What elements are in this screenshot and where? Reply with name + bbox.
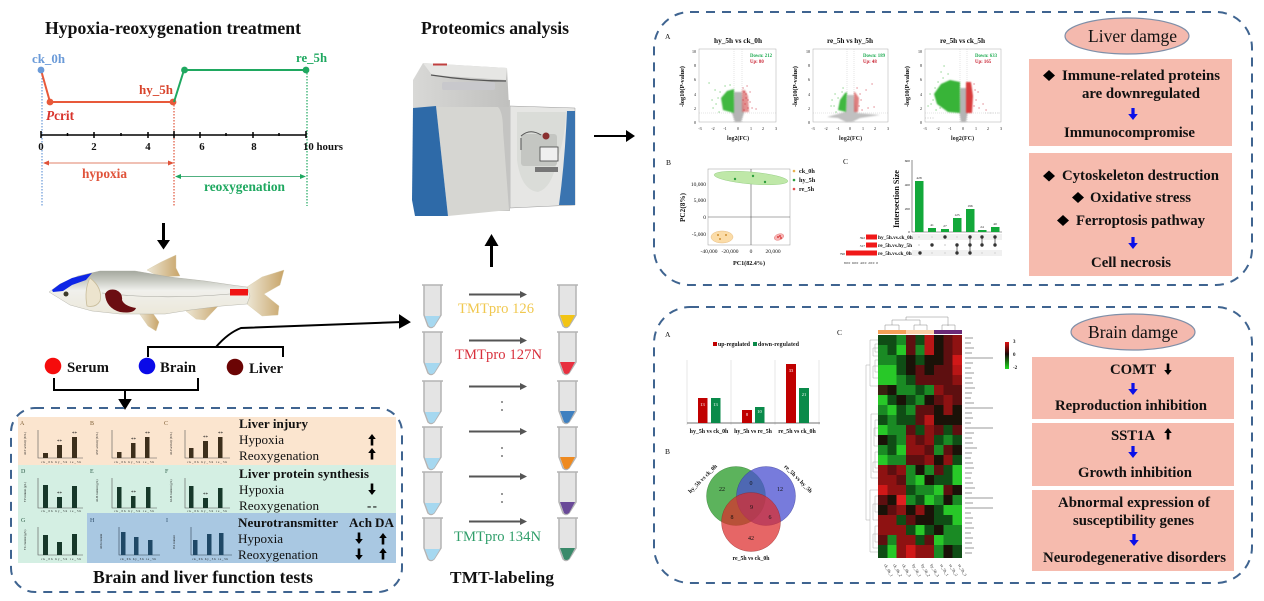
sample labels: re_5h_3	[957, 563, 968, 577]
volcano plot 3: 6	[920, 77, 922, 82]
main cabinet top	[413, 63, 509, 108]
UpSet plot: re_5h.vs.ck_0h	[878, 251, 912, 257]
liver injury bar charts A-C: A	[20, 421, 25, 427]
volcano plot 1	[679, 36, 777, 142]
heading: Proteomics analysis: Proteomics analysis	[421, 18, 569, 38]
text block: liver protein synthesis	[239, 466, 377, 513]
sample labels: ck_0h_3	[901, 563, 912, 577]
letter A: A	[665, 330, 671, 339]
liver injury bar charts A-C: AST activity (U/L)	[95, 432, 99, 455]
UpSet plot	[840, 159, 1002, 265]
box: COMT: COMT	[1110, 362, 1156, 378]
heatmap cells	[878, 335, 962, 558]
neurotransmitter bar charts H-I: I	[166, 518, 168, 524]
bar chart G	[21, 518, 83, 561]
title: Hypoxia-reoxygenation treatment: Hypoxia-reoxygenation treatment	[45, 18, 301, 38]
reoxygenation curve	[174, 67, 309, 102]
bar chart G: G	[21, 518, 26, 524]
PCA plot	[679, 168, 816, 267]
marker: ck_0h	[38, 67, 44, 73]
group colour bar	[878, 330, 962, 334]
time axis: 6	[199, 141, 205, 153]
volcano plot 1: -log10(P-value)	[679, 66, 686, 107]
UpSet plot: 27	[943, 224, 947, 228]
sample labels	[883, 563, 968, 578]
liver protein bar charts D-F: E	[90, 469, 94, 475]
liver protein bar charts D-F: **	[57, 492, 62, 497]
liver protein bar charts D-F: GLB content (g/L)	[169, 480, 173, 502]
hypoxia oxygen curve	[41, 70, 176, 105]
PCA plot: 0	[750, 249, 753, 255]
liver protein bar charts D-F: ALB content (g/L)	[95, 480, 99, 502]
serum: Serum	[67, 360, 110, 376]
volcano plot 3: 0	[920, 120, 922, 125]
callout: Liver damge	[1065, 18, 1189, 54]
liver injury bar charts A-C: ck_0h hy_5h re_5h	[187, 460, 228, 464]
arrow: treatment to fish	[157, 223, 170, 250]
PCA plot: 5,000	[694, 198, 706, 204]
box: neurodegenerative disorders: Abnormal expression of	[1058, 495, 1211, 511]
mass spectrometer	[412, 63, 575, 216]
box: immune proteins: Immune-related proteins	[1062, 68, 1220, 84]
liver injury bar charts A-C: **	[203, 436, 208, 441]
text block: neurotransmitter: Hypoxia	[238, 531, 283, 546]
right module blue panel	[559, 111, 575, 205]
volcano plot 1: 6	[694, 77, 696, 82]
top bezel	[423, 63, 507, 80]
volcano plot 1: 2	[762, 126, 764, 131]
PCA plot: 0	[703, 215, 706, 221]
box: SST1A	[1032, 423, 1234, 486]
UpSet plot: 200	[905, 207, 910, 211]
liver	[227, 359, 284, 377]
liver injury bar charts A-C	[20, 421, 230, 464]
box: neurodegenerative disorders: Neurodegenerative disorders	[1043, 550, 1226, 566]
text block: neurotransmitter: Reoxygenation	[238, 547, 318, 562]
volcano plot 3: re_5h vs ck_5h	[940, 36, 985, 45]
box: cell necrosis: Ferroptosis pathway	[1076, 213, 1206, 229]
letter C: C	[837, 328, 842, 337]
colour scale: -2	[1013, 366, 1018, 371]
Venn diagram: re_5h vs ck_0h	[733, 556, 770, 562]
ion source	[521, 132, 558, 172]
gill cover	[86, 278, 101, 306]
PCA legend	[793, 168, 816, 193]
volcano plot 1: hy_5h vs ck_0h	[714, 36, 762, 45]
UpSet plot: hy_5h.vs.ck_0h	[878, 235, 913, 241]
volcano plot 1: Down: 212	[750, 54, 773, 59]
liver protein bar charts D-F: F	[165, 469, 169, 475]
Venn diagram: 22	[719, 487, 725, 493]
volcano plot 1: 10	[692, 49, 696, 54]
reoxygenation span arrow	[175, 174, 306, 194]
bar chart G: ck_0h hy_5h re_5h	[41, 557, 82, 561]
text block: liver injury	[239, 416, 376, 463]
liver injury bar charts A-C: **	[218, 432, 224, 437]
PCA plot: 10,000	[691, 182, 706, 188]
PCA legend: hy_5h	[799, 177, 816, 184]
muscle sample highlight	[230, 289, 248, 296]
text block: liver injury: Liver injury	[239, 416, 308, 431]
time axis: 4	[145, 141, 151, 153]
arrow: TMT to proteomics	[484, 234, 498, 267]
label: TMTpro 134N: TMTpro 134N	[454, 529, 541, 545]
box: immune proteins: Immunocompromise	[1064, 125, 1195, 141]
volcano plot 2: re_5h vs hy_5h	[827, 36, 873, 45]
dotted time guides	[42, 70, 307, 206]
text block: neurotransmitter	[238, 515, 395, 562]
Venn diagram: 9	[750, 505, 753, 511]
panel: brain and liver function tests	[11, 408, 402, 592]
grouped bar chart: 10	[757, 409, 762, 414]
label: TMTpro 127N: TMTpro 127N	[455, 347, 542, 363]
liver protein bar charts D-F: ck_0h hy_5h re_5h	[41, 509, 82, 513]
grouped bar chart	[687, 342, 820, 435]
Venn diagram: 42	[748, 536, 754, 542]
volcano plot 2: 4	[808, 92, 810, 97]
box: COMT: Reproduction inhibition	[1055, 398, 1207, 414]
letter C: C	[843, 157, 848, 166]
volcano plot 1: 3	[775, 126, 777, 131]
UpSet plot: re_5h.vs.hy_5h	[878, 243, 912, 249]
volcano plot 1: 0	[694, 120, 696, 125]
PCA plot: -20,000	[722, 249, 739, 255]
label: ck_0h: ck_0h	[32, 52, 65, 66]
UpSet plot: Intersection Size	[892, 170, 901, 228]
volcano plot 3: Up: 165	[975, 60, 992, 65]
UpSet plot: 317	[860, 244, 865, 248]
serum	[45, 358, 110, 376]
PCA plot: -5,000	[692, 232, 706, 238]
PCA plot: -40,000	[701, 249, 718, 255]
box: SST1A: SST1A	[1111, 428, 1155, 444]
caption: TMT-labeling: TMT-labeling	[450, 568, 554, 587]
dashed border	[654, 12, 1252, 285]
grouped bar chart: 13	[713, 402, 718, 407]
UpSet plot: 196	[967, 204, 973, 208]
colour scale: 0	[1013, 353, 1016, 358]
grouped bar chart: down-regulated	[758, 342, 800, 348]
volcano plot 3: -3	[923, 126, 927, 131]
liver: Liver	[249, 361, 284, 377]
sample labels: hy_5h_3	[929, 563, 940, 578]
box: neurodegenerative disorders	[1032, 490, 1234, 571]
bezel line	[431, 75, 506, 81]
panel caption: Brain and liver function tests	[93, 567, 313, 587]
volcano plot 1: -2	[711, 126, 715, 131]
main cabinet door	[436, 107, 509, 216]
liver injury bar charts A-C: ck_0h hy_5h re_5h	[114, 460, 154, 464]
Venn diagram: 12	[777, 487, 783, 493]
liver injury bar charts A-C: B	[90, 421, 94, 427]
box: immune proteins: are downregulated	[1082, 86, 1201, 102]
panel: liver proteomics results	[654, 12, 1252, 285]
colour scale: 3	[1013, 340, 1016, 345]
volcano plot 3: 0	[962, 126, 964, 131]
grouped bar chart: hy_5h vs re_5h	[734, 429, 773, 435]
eye	[64, 292, 68, 296]
box: cell necrosis: Oxidative stress	[1090, 190, 1191, 206]
volcano plot 3: log2(FC)	[951, 135, 974, 142]
box: cell necrosis: Cell necrosis	[1091, 255, 1171, 271]
liver protein bar charts D-F	[21, 469, 230, 513]
liver protein bar charts D-F: D	[21, 469, 26, 475]
liver protein bar charts D-F: **	[131, 491, 136, 496]
text block: liver protein synthesis: Liver protein synthesis	[239, 466, 369, 481]
timeline diagram	[32, 51, 343, 206]
volcano plot 1: 0	[737, 126, 739, 131]
liver injury bar charts A-C: **	[57, 440, 62, 445]
hypoxia span arrow: hypoxia	[82, 166, 127, 181]
brain highlight	[52, 273, 92, 292]
volcano plot 2: Down: 189	[863, 54, 886, 59]
volcano plot 2: -2	[824, 126, 828, 131]
box: cell necrosis	[1029, 153, 1232, 276]
Venn diagram: 0	[750, 481, 752, 487]
grouped bar chart: 13	[700, 402, 706, 407]
volcano plot 3: -2	[936, 126, 940, 131]
volcano plot 1: -3	[698, 126, 702, 131]
Venn diagram	[688, 463, 814, 562]
grouped bar chart: up-regulated	[718, 342, 751, 348]
ellipsis dots	[501, 401, 503, 503]
lateral line	[102, 293, 230, 297]
liver protein bar charts D-F: ck_0h hy_5h re_5h	[114, 509, 154, 513]
volcano plot 2: 0	[849, 126, 851, 131]
legend: tissues	[45, 358, 284, 377]
callout: Liver damge: Liver damge	[1088, 26, 1177, 46]
neurotransmitter bar charts H-I: DA content	[172, 535, 176, 549]
volcano plot 2: log2(FC)	[839, 135, 862, 142]
colour scale	[1005, 340, 1018, 371]
UpSet plot: 600	[905, 159, 910, 163]
volcano plot 2: 2	[808, 106, 810, 111]
text block: neurotransmitter: Neurotransmitter	[238, 515, 338, 530]
Venn diagram: re_5h vs hy_5h	[782, 464, 814, 495]
fish body	[49, 271, 250, 314]
time axis: 10 hours	[303, 141, 343, 153]
UpSet plot: 400	[905, 183, 910, 187]
grouped bar chart: 8	[746, 412, 749, 417]
labelling arrows	[469, 291, 527, 525]
front display strip	[442, 82, 495, 90]
text block: neurotransmitter: DA	[375, 515, 395, 530]
liver injury bar charts A-C: C	[164, 421, 168, 427]
brain: Brain	[160, 360, 196, 376]
sample labels: ck_0h_2	[892, 563, 903, 577]
box: neurodegenerative disorders: susceptibility genes	[1073, 513, 1194, 529]
volcano plot 2: 8	[808, 63, 810, 68]
Venn diagram: 8	[730, 515, 734, 521]
grouped bar chart: 21	[802, 392, 806, 397]
tissue sampling brackets and arrow to TMT labelling	[54, 316, 409, 408]
volcano plot 2: -log10(P-value)	[792, 66, 799, 107]
neurotransmitter bar charts H-I: ACh content	[99, 534, 103, 549]
neurotransmitter bar charts H-I: ck_0h hy_5h re_5h	[120, 557, 156, 561]
fish illustration with sampled tissues	[49, 255, 284, 331]
UpSet plot: 392	[860, 236, 865, 240]
text block: liver protein synthesis: Reoxygenation	[239, 498, 319, 513]
text block: neurotransmitter: Ach	[349, 515, 373, 530]
box: immune proteins	[1029, 59, 1232, 146]
volcano plot 1: Up: 80	[750, 60, 764, 65]
volcano plot 1: log2(FC)	[727, 135, 749, 142]
volcano plot 3: 3	[1000, 126, 1002, 131]
neurotransmitter bar charts H-I: H	[90, 518, 95, 524]
time axis: 2	[91, 141, 97, 153]
source tubes	[422, 285, 443, 560]
liver protein bar charts D-F: TP content (g/L)	[23, 482, 27, 502]
volcano plot 2: Up: 48	[863, 60, 877, 65]
grouped bar chart: 33	[789, 368, 794, 373]
PCA legend: ck_0h	[799, 168, 815, 175]
UpSet plot: 790	[840, 252, 845, 256]
row dendrogram	[866, 340, 878, 552]
UpSet plot: 0	[908, 230, 910, 234]
PCA plot: PC2(8%)	[679, 192, 687, 222]
label: Pcrit: Pcrit	[46, 108, 75, 123]
volcano plot 3: Down: 633	[975, 54, 998, 59]
sample labels: ck_0h_1	[883, 563, 894, 577]
text block: liver injury: Hypoxia	[239, 432, 284, 447]
heatmap	[866, 317, 1018, 578]
panel: brain proteomics results	[654, 307, 1252, 583]
liver injury bar charts A-C: **	[145, 432, 150, 437]
box: cell necrosis: Cytoskeleton destruction	[1062, 168, 1219, 184]
dashed border	[11, 408, 402, 592]
main cabinet backing	[497, 100, 510, 211]
dashed border	[654, 307, 1252, 583]
liver injury bar charts A-C: ck_0h hy_5h re_5h	[41, 460, 82, 464]
UpSet plot: 800 600 400 200 0	[844, 261, 878, 265]
sample labels: hy_5h_1	[911, 563, 922, 578]
time axis: 8	[251, 141, 257, 153]
volcano plot 3: 8	[920, 63, 922, 68]
UpSet plot: 125	[954, 213, 960, 217]
volcano plot 1: 8	[694, 63, 696, 68]
volcano plot 2: 10	[806, 49, 810, 54]
liver injury bar charts A-C: ALP activity (U/L)	[169, 432, 173, 455]
volcano plot 3: -log10(P-value)	[904, 66, 911, 107]
PCA plot: 20,000	[765, 249, 781, 255]
PCA plot: PC1(82.4%)	[733, 260, 765, 267]
volcano plot 2: 6	[808, 77, 810, 82]
gene labels, illegible at source	[965, 338, 993, 553]
hypoxia span arrow	[43, 160, 174, 181]
neurotransmitter bar charts H-I	[90, 518, 232, 561]
volcano plot 3: 2	[920, 106, 922, 111]
volcano plot 2	[792, 36, 889, 142]
labelled tubes	[557, 285, 578, 560]
letter A: A	[665, 32, 671, 41]
liver injury bar charts A-C: ALT activity (U/L)	[23, 432, 27, 455]
Venn diagram: 6	[768, 515, 772, 521]
volcano plot 3: 2	[987, 126, 989, 131]
UpSet plot: 40	[993, 222, 997, 226]
volcano plot 2: -1	[836, 126, 840, 131]
letter B: B	[665, 447, 670, 456]
time axis	[38, 131, 343, 153]
TMT labelling workflow	[422, 285, 578, 587]
label: TMTpro 126: TMTpro 126	[458, 301, 534, 317]
text block: liver protein synthesis: Hypoxia	[239, 482, 284, 497]
volcano plot 2: 1	[862, 126, 864, 131]
liver injury bar charts A-C: **	[131, 438, 136, 443]
label: re_5h: re_5h	[296, 51, 327, 65]
volcano plot 3: 4	[920, 92, 922, 97]
time axis: 0	[38, 141, 44, 153]
volcano plot 2: -3	[811, 126, 815, 131]
text block: liver injury: Reoxygenation	[239, 448, 319, 463]
volcano plot 1: -1	[723, 126, 727, 131]
callout: Brain damge: Brain damge	[1088, 322, 1178, 342]
matrix rows	[912, 234, 1002, 256]
reoxygenation span arrow: reoxygenation	[204, 179, 286, 194]
liver highlight	[105, 290, 136, 312]
volcano plot 3: 10	[918, 49, 922, 54]
liver protein bar charts D-F: **	[203, 493, 208, 498]
sample labels: hy_5h_2	[920, 563, 931, 578]
UpSet plot: 428	[916, 176, 922, 180]
brain	[139, 358, 196, 376]
neurotransmitter bar charts H-I: ck_0h hy_5h re_5h	[192, 557, 228, 561]
box: COMT	[1032, 357, 1234, 419]
callout: Brain damge	[1071, 314, 1195, 350]
bar chart G: TC content (g/L)	[23, 530, 27, 550]
UpSet plot: 24	[980, 225, 984, 229]
volcano plot 1: 2	[694, 106, 696, 111]
volcano plot 3: -1	[948, 126, 952, 131]
letter B: B	[666, 158, 671, 167]
fins	[139, 255, 284, 331]
sample labels: re_5h_2	[948, 563, 959, 577]
volcano plot 1: 4	[694, 92, 696, 97]
volcano plot 2: 0	[808, 120, 810, 125]
set-size bars	[846, 234, 877, 256]
grouped bar chart: re_5h vs ck_0h	[778, 429, 816, 435]
liver injury bar charts A-C: **	[72, 432, 78, 437]
box: SST1A: Growth inhibition	[1078, 465, 1192, 481]
main cabinet blue side	[412, 106, 448, 216]
label: hy_5h: hy_5h	[139, 82, 174, 97]
volcano plot 2: 3	[887, 126, 889, 131]
UpSet plot: 41	[930, 223, 934, 227]
right module	[510, 106, 575, 208]
PCA legend: re_5h	[799, 186, 815, 193]
sample window	[517, 112, 566, 192]
volcano plot 2: 2	[874, 126, 876, 131]
sample labels: re_5h_1	[939, 563, 950, 577]
volcano plot 3: 1	[975, 126, 977, 131]
colour bands	[18, 417, 396, 563]
Venn diagram: hy_5h vs ck_0h	[688, 463, 719, 495]
grouped bar chart: hy_5h vs ck_0h	[690, 429, 729, 435]
volcano plot 1: 1	[750, 126, 752, 131]
volcano plot 3	[904, 36, 1002, 142]
column dendrogram	[885, 317, 955, 330]
brand mark	[433, 64, 447, 66]
arrow: proteomics to results	[594, 130, 635, 142]
text block: liver protein synthesis: --	[367, 498, 377, 513]
liver protein bar charts D-F: ck_0h hy_5h re_5h	[187, 509, 228, 513]
